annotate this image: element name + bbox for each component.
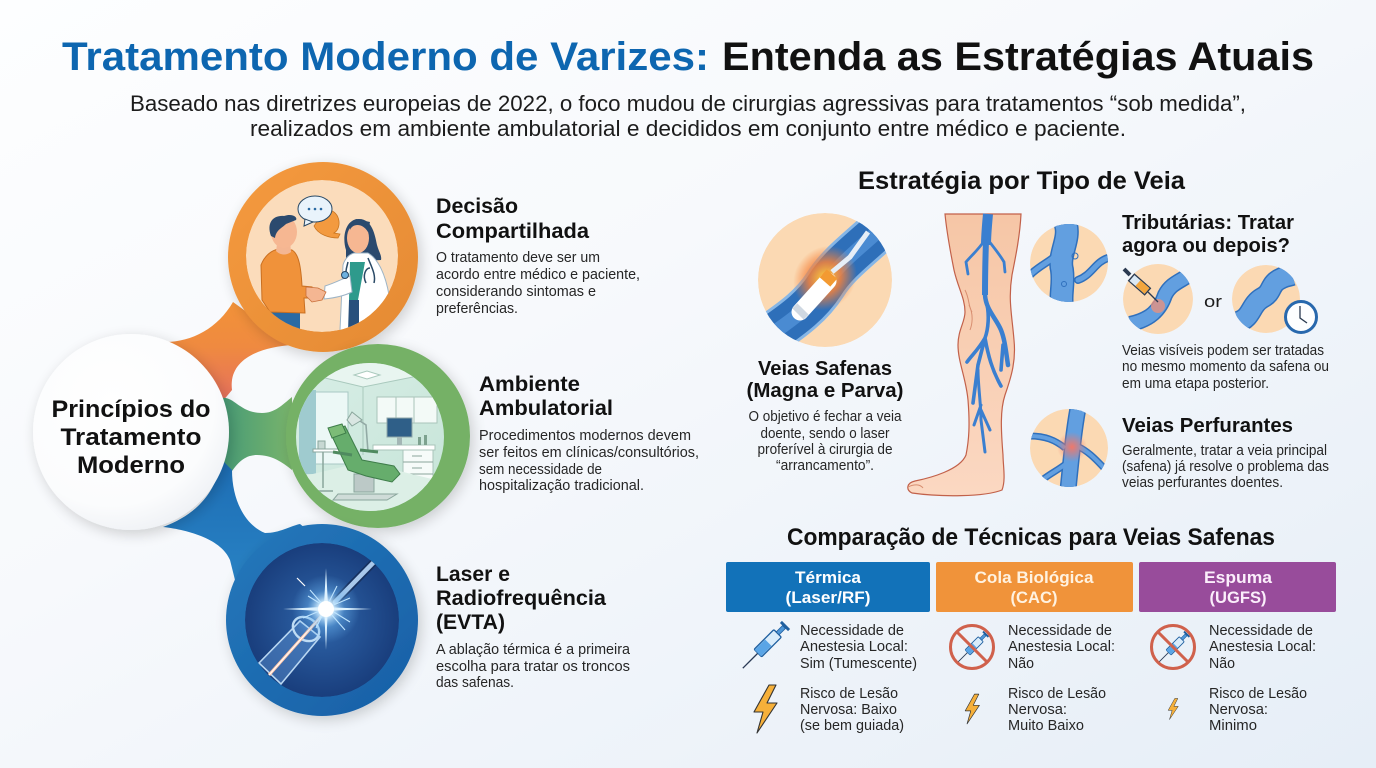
header: foam: Espuma bbox=[1204, 568, 1273, 587]
text: laser and radiofrequency: das safenas. bbox=[436, 675, 514, 691]
text: nerve risk: Risco de Lesão bbox=[1008, 686, 1106, 702]
lamp bbox=[360, 421, 369, 450]
center label: Tratamento bbox=[60, 424, 202, 451]
heading: strategy by vein type: Estratégia por Tipo de Veia bbox=[858, 167, 1186, 195]
column: thermal bbox=[726, 562, 930, 734]
header: glue: (CAC) bbox=[1010, 588, 1058, 607]
man bbox=[261, 215, 312, 335]
header: foam bbox=[1139, 562, 1336, 612]
text: anesthesia: Não bbox=[1008, 656, 1034, 672]
text: tributaries heading: agora ou depois? bbox=[1122, 235, 1290, 257]
text: nerve risk: Risco de Lesão bbox=[1209, 686, 1307, 702]
text: laser and radiofrequency: Laser e bbox=[436, 563, 510, 586]
text: laser and radiofrequency bbox=[436, 563, 631, 691]
text: outpatient setting: Procedimentos modernos devem bbox=[479, 428, 691, 444]
header: foam: (UGFS) bbox=[1210, 588, 1266, 607]
text: laser and radiofrequency: escolha para tratar os troncos bbox=[436, 659, 630, 675]
column: biological glue bbox=[936, 562, 1133, 734]
subtitle: Baseado nas diretrizes europeias de 2022, o foco mudou de cirurgias agressivas para tratamentos “sob medida”, bbox=[130, 91, 1246, 116]
icon: tributary veins bbox=[1030, 224, 1108, 305]
connector: orange bbox=[165, 302, 292, 402]
orange ring bbox=[228, 162, 418, 352]
light burst bbox=[283, 568, 372, 650]
text: tributaries description: em uma etapa posterior. bbox=[1122, 376, 1269, 392]
icon: saphenous vein laser bbox=[758, 213, 892, 347]
tube ring bbox=[292, 616, 320, 642]
blue ring bbox=[226, 524, 418, 716]
handshake bbox=[306, 287, 326, 302]
text: tributaries heading bbox=[1122, 212, 1294, 257]
illustration: laser ablation bbox=[245, 543, 399, 697]
text: outpatient setting bbox=[479, 373, 699, 494]
title: Tratamento Moderno de Varizes: bbox=[62, 35, 709, 79]
icon: lightning bolt large bbox=[754, 685, 777, 733]
text: anesthesia bbox=[800, 623, 917, 672]
text: anesthesia: Anestesia Local: bbox=[800, 639, 908, 655]
text: outpatient setting: Ambulatorial bbox=[479, 397, 613, 420]
window bbox=[306, 392, 348, 464]
veins bbox=[966, 214, 1008, 452]
text: laser and radiofrequency: (EVTA) bbox=[436, 611, 505, 634]
title: Entenda as Estratégias Atuais bbox=[722, 35, 1314, 79]
text: perforating veins: (safena) já resolve o problema das bbox=[1122, 459, 1329, 475]
text: outpatient setting: ser feitos em clínicas/consultórios, bbox=[479, 445, 699, 461]
text: nerve risk: (se bem guiada) bbox=[800, 718, 904, 734]
icon: treat later with clock bbox=[1232, 265, 1316, 333]
text: saphenous veins: Veias Safenas bbox=[758, 358, 892, 380]
text: shared decision: preferências. bbox=[436, 301, 518, 317]
text: anesthesia: Necessidade de bbox=[1209, 623, 1313, 639]
text: nerve risk bbox=[1209, 686, 1307, 734]
text: anesthesia: Sim (Tumescente) bbox=[800, 656, 917, 672]
text: shared decision: Compartilhada bbox=[436, 220, 589, 243]
label: or: or bbox=[1204, 292, 1222, 311]
text: anesthesia bbox=[1209, 623, 1316, 672]
text: tributaries description bbox=[1122, 343, 1329, 392]
icon: syringe bbox=[739, 621, 790, 672]
text: tributaries heading: Tributárias: Tratar bbox=[1122, 212, 1294, 234]
laser fibre bbox=[269, 612, 325, 675]
text: nerve risk: Nervosa: bbox=[1008, 702, 1067, 718]
icon: lightning bolt small bbox=[1168, 698, 1178, 720]
header: thermal bbox=[726, 562, 930, 612]
column: foam bbox=[1139, 562, 1336, 734]
text: nerve risk: Nervosa: Baixo bbox=[800, 702, 897, 718]
text: nerve risk: Risco de Lesão bbox=[800, 686, 898, 702]
text: perforating veins: veias perfurantes doentes. bbox=[1122, 475, 1283, 491]
panel: principles diagram bbox=[33, 162, 470, 716]
center label: Moderno bbox=[77, 452, 185, 479]
header: thermal: Térmica bbox=[795, 568, 862, 587]
text: saphenous veins: doente, sendo o laser bbox=[760, 426, 890, 442]
green ring bbox=[286, 344, 470, 528]
text: tributaries description: no mesmo momento da safena ou bbox=[1122, 359, 1329, 375]
text: shared decision: O tratamento deve ser um bbox=[436, 250, 600, 266]
text: shared decision bbox=[436, 195, 640, 317]
connector: green bbox=[205, 397, 292, 474]
illustration: leg with veins bbox=[908, 214, 1021, 496]
speech bubbles bbox=[298, 196, 340, 238]
text: nerve risk: Nervosa: bbox=[1209, 702, 1268, 718]
subtitle bbox=[130, 91, 1246, 141]
text: saphenous veins: proferível à cirurgia de bbox=[758, 442, 892, 458]
connector: blue bbox=[163, 460, 320, 600]
text: outpatient setting: Ambiente bbox=[479, 373, 580, 396]
icon: lightning bolt medium bbox=[965, 694, 979, 724]
text: anesthesia bbox=[1008, 623, 1115, 672]
text: tributaries description: Veias visíveis podem ser tratadas bbox=[1122, 343, 1324, 359]
text: laser and radiofrequency: Radiofrequência bbox=[436, 587, 606, 610]
text: saphenous veins bbox=[746, 358, 904, 474]
text: nerve risk bbox=[1008, 686, 1106, 734]
subtitle: realizados em ambiente ambulatorial e decididos em conjunto entre médico e paciente. bbox=[250, 116, 1126, 141]
text: saphenous veins: O objetivo é fechar a veia bbox=[748, 409, 902, 425]
text: anesthesia: Não bbox=[1209, 656, 1235, 672]
text: shared decision: acordo entre médico e paciente, bbox=[436, 267, 640, 283]
text: anesthesia: Anestesia Local: bbox=[1008, 639, 1115, 655]
text: perforating veins bbox=[1122, 415, 1329, 491]
text: nerve risk: Muito Baixo bbox=[1008, 718, 1084, 734]
text: perforating veins: Veias Perfurantes bbox=[1122, 415, 1293, 437]
doctor bbox=[324, 219, 390, 332]
catheter tube bbox=[259, 621, 320, 684]
text: outpatient setting: sem necessidade de bbox=[479, 462, 602, 478]
illustration: outpatient room bbox=[296, 363, 444, 511]
header: glue bbox=[936, 562, 1133, 612]
upper fibre bbox=[335, 563, 373, 602]
text: saphenous veins: “arrancamento”. bbox=[776, 458, 874, 474]
cabinets bbox=[377, 397, 437, 423]
desk and monitor bbox=[373, 445, 435, 450]
center label bbox=[52, 396, 211, 479]
cart bbox=[318, 452, 333, 492]
text: nerve risk: Minimo bbox=[1209, 718, 1257, 734]
center label: Princípios do bbox=[52, 396, 211, 423]
text: laser and radiofrequency: A ablação térmica é a primeira bbox=[436, 642, 631, 658]
text: anesthesia: Necessidade de bbox=[800, 623, 904, 639]
text: shared decision: considerando sintomas e bbox=[436, 284, 596, 300]
text: saphenous veins: (Magna e Parva) bbox=[746, 380, 904, 402]
text: anesthesia: Anestesia Local: bbox=[1209, 639, 1316, 655]
text: outpatient setting: hospitalização tradicional. bbox=[479, 478, 644, 494]
icon: no syringe bbox=[1152, 626, 1194, 668]
text: shared decision: Decisão bbox=[436, 195, 518, 218]
illustration: shared decision bbox=[246, 180, 398, 335]
floor bbox=[307, 466, 431, 511]
title bbox=[62, 35, 1314, 79]
heading: technique comparison: Comparação de Técnicas para Veias Safenas bbox=[787, 524, 1275, 551]
header: thermal: (Laser/RF) bbox=[786, 588, 870, 607]
text: perforating veins: Geralmente, tratar a veia principal bbox=[1122, 443, 1327, 459]
icon: no syringe bbox=[950, 626, 994, 668]
dental chair bbox=[328, 424, 400, 500]
icon: perforating veins bbox=[1030, 408, 1108, 490]
icon: treat now with injection bbox=[1123, 264, 1193, 334]
header: glue: Cola Biológica bbox=[974, 568, 1094, 587]
center circle bbox=[33, 334, 229, 530]
text: anesthesia: Necessidade de bbox=[1008, 623, 1112, 639]
text: nerve risk bbox=[800, 686, 904, 734]
